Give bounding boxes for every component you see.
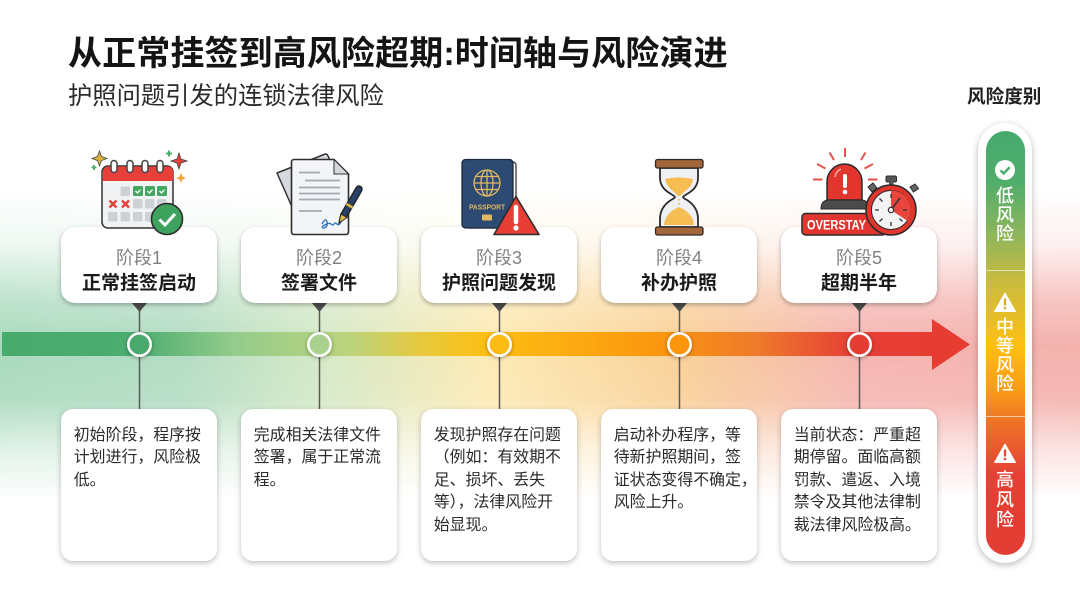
text block: stage 1: 计划进行，风险极 xyxy=(74,449,201,466)
connector lines and markers xyxy=(125,303,874,409)
icon: check xyxy=(995,160,1015,180)
label: high risk: 风 xyxy=(996,490,1014,510)
panel: stage 5 header xyxy=(781,227,937,303)
text block: stage 5 xyxy=(781,409,937,561)
text block: stage 5: 禁令及其他法律制 xyxy=(794,494,921,511)
label: medium risk: 险 xyxy=(996,374,1014,394)
panel: stage 4 header: 阶段4 xyxy=(656,248,702,268)
text block: stage 5: 罚款、遣返、入境 xyxy=(794,472,921,489)
panel: stage 5 header: 超期半年 xyxy=(821,273,897,294)
text block: stage 5: 当前状态：严重超 xyxy=(794,426,921,444)
icon: hourglass xyxy=(654,158,704,236)
icon: warning xyxy=(994,444,1016,463)
high risk section xyxy=(994,444,1016,530)
icon: calendar with check xyxy=(91,150,188,236)
panel: risk level legend xyxy=(978,123,1032,563)
label: medium risk xyxy=(996,317,1014,394)
background colour band xyxy=(0,213,1080,487)
subtitle: 护照问题引发的连锁法律风险 xyxy=(68,83,384,110)
panel: stage 3 header xyxy=(421,227,577,303)
label: medium risk: 等 xyxy=(996,336,1014,356)
text block: stage 1: 低。 xyxy=(74,472,106,489)
icon: signed documents and pen xyxy=(276,153,363,236)
panel: stage 4 header: 补办护照 xyxy=(641,273,717,294)
text block: stage 3: 足、损坏、丢失 xyxy=(434,472,545,489)
text block: stage 3: 始显现。 xyxy=(434,517,497,534)
text block: stage 3 xyxy=(421,409,577,561)
risk gradient scale xyxy=(986,131,1025,555)
panel: stage 2 header xyxy=(241,227,397,303)
text block: stage 1: 初始阶段，程序按 xyxy=(74,426,201,444)
label: medium risk: 中 xyxy=(996,317,1014,337)
icon: overstay siren and stopwatch: OVERSTAY xyxy=(807,218,866,232)
panel: stage 1 header xyxy=(61,227,217,303)
label: low risk: 风 xyxy=(996,205,1014,225)
panel: stage 1 header: 阶段1 xyxy=(116,248,162,268)
text block: stage 2: 签署，属于正常流 xyxy=(254,449,381,466)
label: high risk: 高 xyxy=(996,470,1014,490)
panel: stage 2 header: 签署文件 xyxy=(281,273,357,294)
label: low risk xyxy=(996,186,1014,244)
text block: stage 1 xyxy=(61,409,217,561)
icon: passport with warning xyxy=(461,158,540,236)
low risk section xyxy=(995,160,1015,244)
text block: stage 4: 待新护照期间，签 xyxy=(614,449,741,466)
panel: stage 4 header xyxy=(601,227,757,303)
timeline arrow xyxy=(2,319,970,370)
panel: stage 3 header: 阶段3 xyxy=(476,248,522,268)
label: medium risk: 风 xyxy=(996,355,1014,375)
label: low risk: 险 xyxy=(996,224,1014,244)
text block: stage 2: 程。 xyxy=(254,472,286,489)
panel: stage 1 header: 正常挂签启动 xyxy=(82,273,196,294)
text block: stage 3: （例如：有效期不 xyxy=(434,449,561,466)
text block: stage 5: 期停留。面临高额 xyxy=(794,449,921,466)
divider low/medium xyxy=(986,270,1025,271)
text block: stage 2: 完成相关法律文件 xyxy=(254,426,381,444)
icon: warning xyxy=(994,292,1016,312)
text block: stage 2 xyxy=(241,409,397,561)
icon: overstay siren and stopwatch xyxy=(801,148,920,236)
legend heading: 风险度别 xyxy=(967,86,1041,107)
text block: stage 4: 证状态变得不确定， xyxy=(614,472,757,489)
label: high risk: 险 xyxy=(996,510,1014,530)
text block: stage 4 xyxy=(601,409,757,561)
panel: stage 2 header: 阶段2 xyxy=(296,248,342,268)
label: high risk xyxy=(996,470,1014,530)
text block: stage 3: 等），法律风险开 xyxy=(434,494,553,511)
icon: passport with warning: PASSPORT xyxy=(469,202,505,211)
text block: stage 3: 发现护照存在问题 xyxy=(434,426,561,444)
panel: stage 5 header: 阶段5 xyxy=(836,248,882,268)
medium risk section xyxy=(994,292,1016,394)
text block: stage 5: 裁法律风险极高。 xyxy=(794,517,921,534)
title: 从正常挂签到高风险超期:时间轴与风险演进 xyxy=(68,35,728,73)
panel: stage 3 header: 护照问题发现 xyxy=(442,273,556,294)
text block: stage 4: 风险上升。 xyxy=(614,494,693,511)
text block: stage 4: 启动补办程序，等 xyxy=(614,426,741,444)
divider medium/high xyxy=(986,416,1025,417)
label: low risk: 低 xyxy=(996,186,1014,206)
